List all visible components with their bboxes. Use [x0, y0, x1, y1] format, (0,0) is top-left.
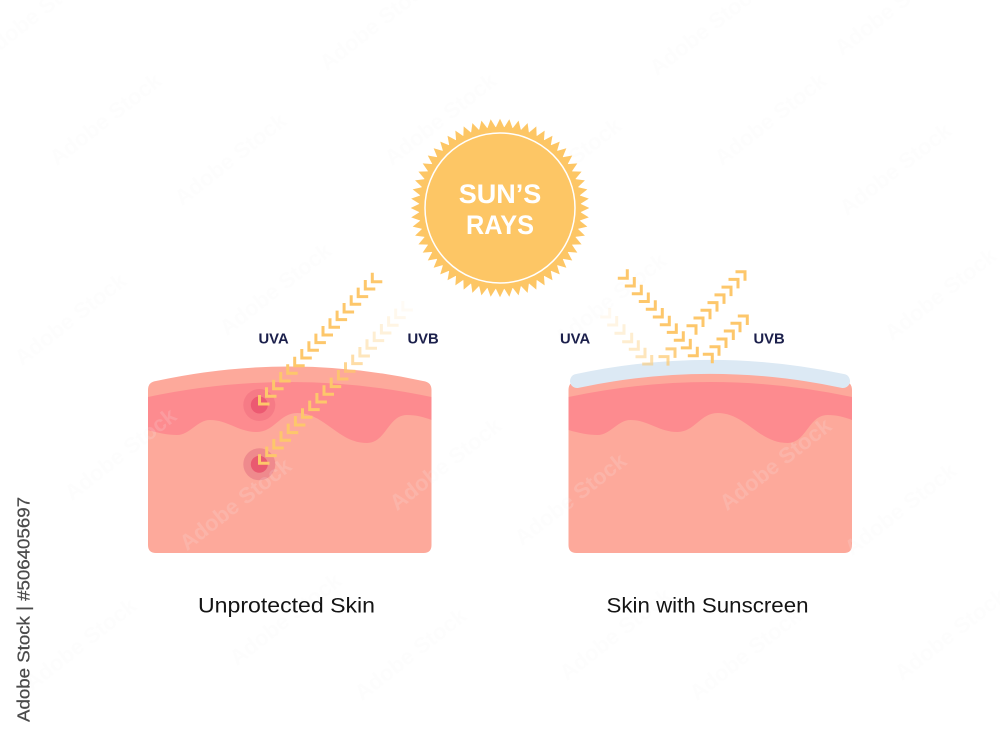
- red dermis layer: [568, 382, 852, 443]
- watermark: Adobe Stock: [215, 237, 337, 340]
- right UVA reflected ray: [618, 269, 697, 356]
- caption: unprotected skin: Unprotected Skin: [198, 594, 375, 617]
- label: left UVB: UVB: [408, 331, 439, 347]
- watermark: Adobe Stock: [385, 412, 507, 515]
- watermark: Adobe Stock: [505, 112, 627, 215]
- skin base layer: [148, 366, 432, 553]
- watermark: Adobe Stock: [555, 582, 677, 685]
- label: right UVB: UVB: [754, 331, 785, 347]
- watermark: Adobe Stock: [380, 67, 502, 170]
- label: right UVA: UVA: [560, 331, 590, 347]
- right UVA faded ray: [600, 308, 652, 364]
- ray labels: [258, 331, 785, 347]
- label: left UVA: UVA: [258, 331, 289, 347]
- sun title: [459, 179, 541, 240]
- watermark: Adobe Stock: [10, 267, 132, 370]
- left UVA ray: [260, 273, 382, 404]
- sun serrated edge: [403, 111, 597, 305]
- watermark: Adobe Stock: [60, 402, 182, 505]
- watermark: Adobe Stock: [510, 447, 632, 550]
- watermark: Adobe Stock: [170, 107, 292, 210]
- watermark: Adobe Stock: [715, 412, 837, 515]
- skin base layer: [568, 366, 852, 553]
- watermark: Adobe Stock: [350, 602, 472, 705]
- right skin panel: [568, 366, 852, 553]
- watermark: Adobe Stock: [175, 452, 297, 555]
- watermark: Adobe Stock: [835, 117, 957, 220]
- vertical stock credit: Adobe Stock | #506405697: [14, 497, 34, 722]
- watermark: Adobe Stock: [710, 67, 832, 170]
- watermark: Adobe Stock: [880, 242, 1000, 345]
- sun title: RAYS: [466, 210, 534, 240]
- watermark: Adobe Stock: [225, 567, 347, 670]
- watermark: Adobe Stock: [840, 457, 962, 560]
- red dermis layer: [148, 382, 432, 443]
- watermark: Adobe Stock: [20, 592, 142, 695]
- sun title: SUN’S: [459, 179, 541, 209]
- right UVB reflected ray short: [703, 316, 747, 363]
- watermark: Adobe Stock: [550, 247, 672, 350]
- watermark: Adobe Stock: [45, 67, 167, 170]
- damage spot upper: [243, 389, 275, 421]
- watermark: Adobe Stock: [685, 602, 807, 705]
- sunscreen layer: [577, 367, 843, 381]
- left UVB ray: [260, 301, 413, 463]
- sun badge: [403, 111, 597, 305]
- damage spot lower: [243, 448, 275, 480]
- sun inner ring: [425, 133, 575, 283]
- caption: skin with sunscreen: Skin with Sunscreen: [606, 594, 808, 618]
- left skin panel: [148, 366, 432, 553]
- right UVB reflected ray long: [658, 272, 745, 366]
